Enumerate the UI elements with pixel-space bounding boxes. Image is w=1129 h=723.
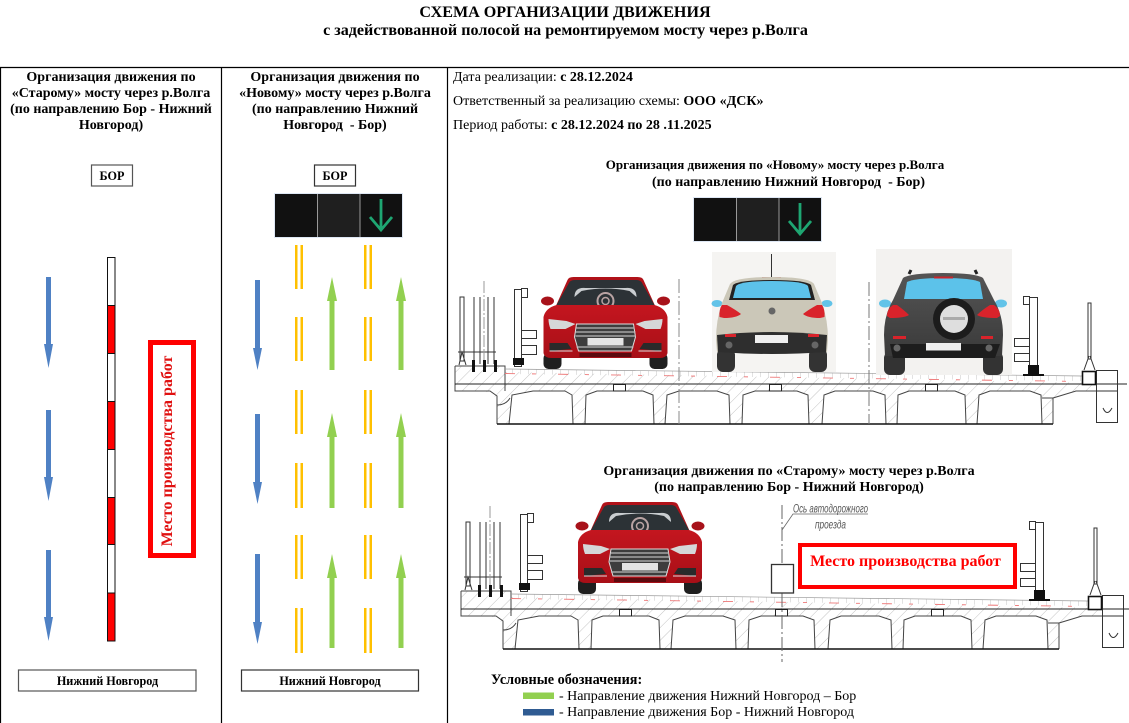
heading: old bridge cross-section (603, 464, 975, 495)
bridge drawing (455, 281, 1127, 424)
car: dark rear view (876, 249, 1012, 375)
heading: new bridge plan: Новгород - Бор) (283, 118, 387, 133)
callout: work zone (800, 545, 1015, 587)
text block: implementation details: Период работы: с 28.12.2024 по 28 .11.2025 (453, 118, 712, 133)
axis line (781, 505, 783, 662)
heading: new bridge plan: (по направлению Нижний (252, 102, 418, 117)
label: Bor: БОР (100, 169, 125, 183)
heading: old bridge plan: Организация движения по (26, 70, 196, 85)
heading: old bridge plan: (по направлению Бор - Нижний (10, 102, 212, 117)
label: Nizhny Novgorod (242, 670, 418, 691)
legend (491, 672, 856, 720)
label: Nizhny Novgorod (18, 670, 196, 691)
title: СХЕМА ОРГАНИЗАЦИИ ДВИЖЕНИЯ (419, 4, 711, 21)
label: Nizhny Novgorod: Нижний Новгород (57, 674, 159, 688)
label: Bor: БОР (323, 169, 348, 183)
icon: lane signal (274, 193, 403, 238)
legend: green swatch (523, 692, 554, 699)
heading: new bridge cross-section (606, 157, 945, 190)
heading: old bridge cross-section: Организация движения по «Старому» мосту через р.Волга (603, 464, 975, 479)
title (323, 4, 808, 39)
heading: new bridge plan: «Новому» мосту через р.Волга (239, 86, 431, 101)
heading: new bridge plan: Организация движения по (250, 70, 420, 85)
arrows: direction Nizhny Novgorod to Bor (327, 277, 406, 648)
panel: old bridge plan (10, 70, 212, 691)
callout: work zone vertical: Место производства работ (159, 355, 176, 546)
heading: new bridge cross-section: (по направлению Нижний Новгород - Бор) (652, 175, 925, 190)
arrows: direction Bor to Nizhny Novgorod (44, 277, 53, 641)
axis line (678, 279, 680, 424)
callout: work zone vertical (150, 342, 194, 556)
axis annotation (782, 502, 868, 532)
panel: new bridge plan (239, 70, 431, 691)
heading: old bridge plan: Новгород) (79, 118, 143, 133)
lane markings (295, 245, 372, 653)
axis annotation: Ось автодорожного (793, 502, 868, 516)
car: beige rear view (712, 252, 836, 372)
icon: lane signal (693, 197, 822, 242)
heading: new bridge cross-section: Организация движения по «Новому» мосту через р.Волга (606, 157, 945, 172)
label: Bor (92, 165, 132, 186)
panel: old bridge cross-section (461, 464, 1129, 662)
legend: blue swatch (523, 709, 554, 716)
arrows: direction Bor to Nizhny Novgorod (253, 280, 262, 644)
car: red front view (576, 502, 704, 594)
bridge drawing (461, 506, 1129, 649)
legend: Условные обозначения: (491, 672, 642, 688)
barrier block (772, 564, 794, 593)
text block: implementation details: Дата реализации: с 28.12.2024 (453, 70, 633, 85)
callout: work zone: Место производства работ (810, 553, 1001, 570)
heading: old bridge plan (10, 70, 212, 133)
panel: new bridge cross-section (455, 157, 1127, 424)
heading: new bridge plan (239, 70, 431, 133)
heading: old bridge cross-section: (по направлению Бор - Нижний Новгород) (654, 480, 924, 495)
label: Bor (314, 165, 356, 186)
title: с задействованной полосой на ремонтируемом мосту через р.Волга (323, 22, 808, 39)
legend: - Направление движения Нижний Новгород – Бор (559, 689, 856, 704)
text block: implementation details: Ответственный за реализацию схемы: ООО «ДСК» (453, 94, 763, 109)
heading: old bridge plan: «Старому» мосту через р.Волга (12, 86, 210, 101)
axis annotation: проезда (815, 518, 846, 532)
label: Nizhny Novgorod: Нижний Новгород (279, 674, 381, 688)
barrier strip (108, 258, 115, 641)
legend: - Направление движения Бор - Нижний Новгород (559, 705, 854, 720)
car: red front view (541, 277, 670, 369)
axis line (868, 282, 870, 424)
text block: implementation details (453, 70, 763, 133)
